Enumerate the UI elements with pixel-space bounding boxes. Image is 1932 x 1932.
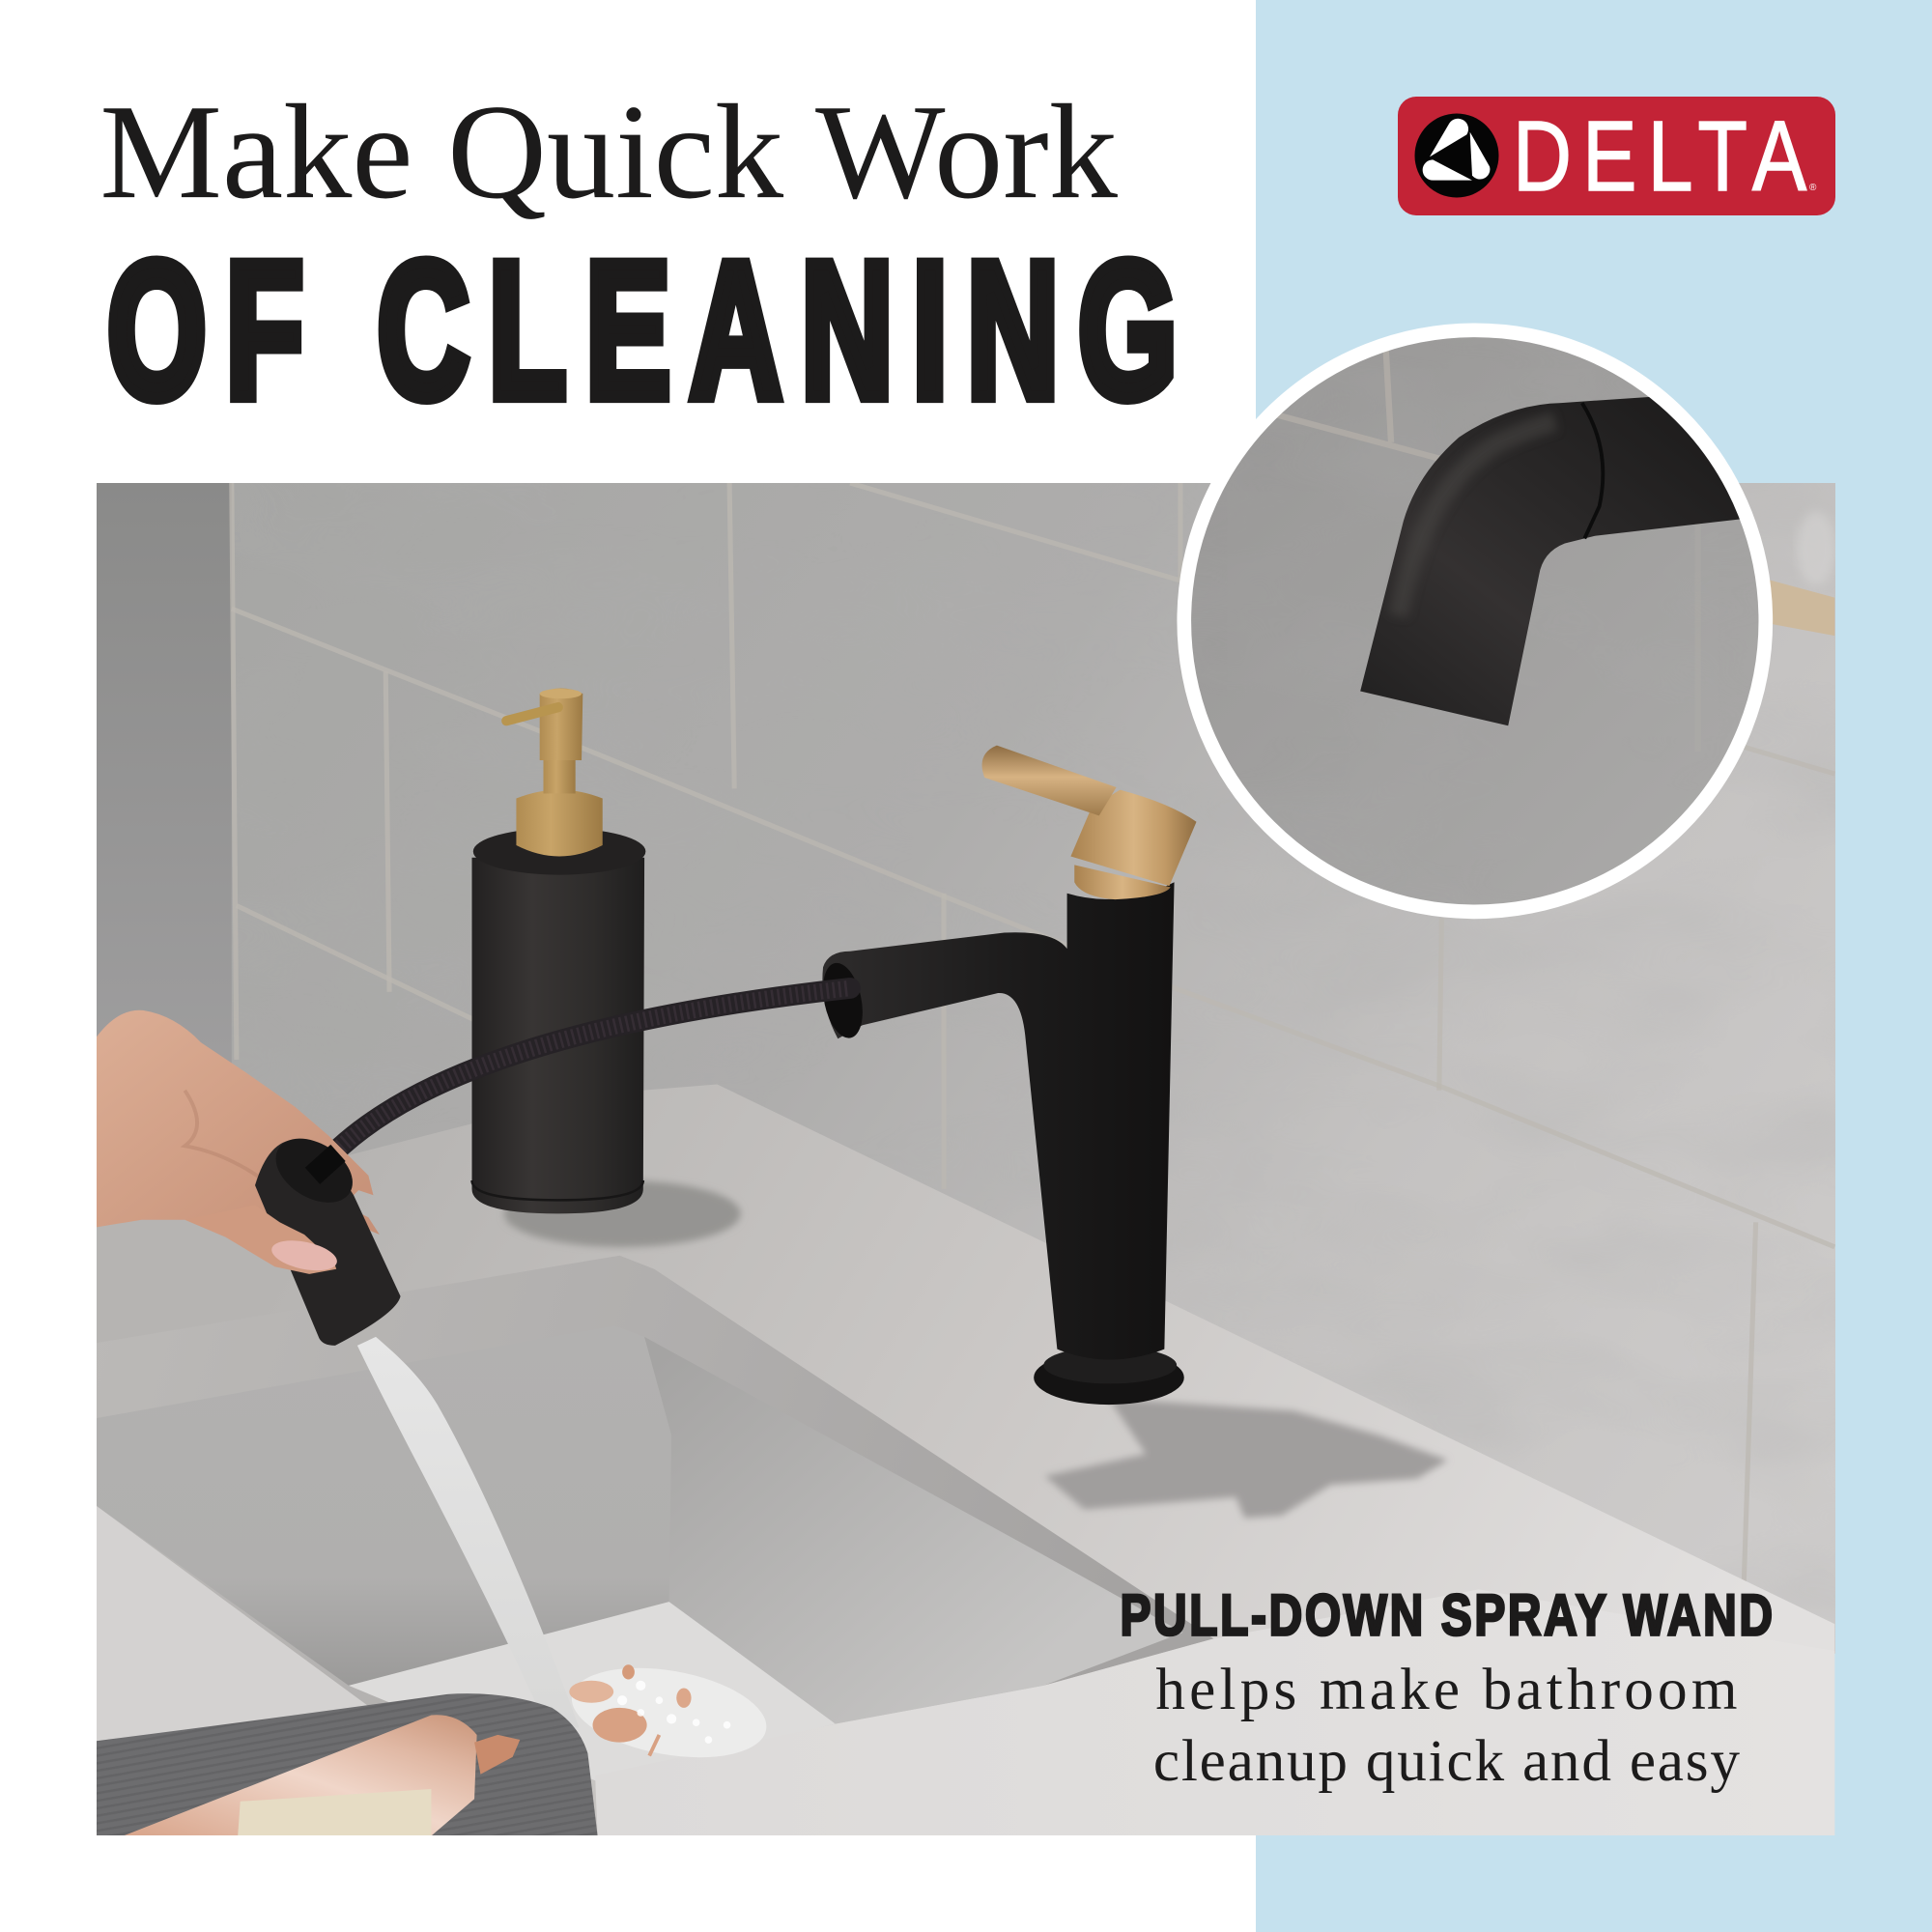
- vanity counter: [96, 1084, 1834, 1836]
- foam and makeup in the basin: [569, 1664, 767, 1758]
- spray wand: [255, 1125, 401, 1346]
- caption heading: PULL-DOWN SPRAY WAND: [1120, 1582, 1773, 1648]
- title line 1: Make Quick Work: [99, 77, 1119, 227]
- towel: [96, 1693, 598, 1836]
- tube of cream: [124, 1715, 520, 1836]
- magnified spout callout: [1182, 330, 1786, 912]
- faucet shadow: [1045, 1399, 1448, 1518]
- callout marble: [1182, 332, 1775, 912]
- dispenser body: [472, 858, 644, 1213]
- dispenser bottom ring: [472, 1180, 643, 1200]
- towel hook highlight: [1799, 514, 1833, 582]
- faucet base: [1034, 1347, 1184, 1405]
- spout collar seam: [1582, 403, 1603, 538]
- sink right wall: [644, 1337, 1182, 1723]
- left counter slab: [97, 1506, 367, 1741]
- callout tile grout: [1269, 332, 1698, 752]
- hand crease: [185, 1091, 259, 1177]
- soap dispenser: [472, 688, 645, 1213]
- logo wordmark: DELTA: [1513, 100, 1806, 212]
- title line 2: OF CLEANING: [107, 221, 1178, 438]
- logo red badge: [1398, 97, 1835, 215]
- front counter slab: [595, 1596, 1445, 1835]
- sink floor: [349, 1602, 836, 1780]
- sponge: [238, 1789, 431, 1836]
- spout opening: [823, 963, 863, 1038]
- logo registered mark: ®: [1809, 183, 1817, 193]
- water stream: [357, 1337, 543, 1644]
- title: [99, 77, 1178, 438]
- caption: [1120, 1582, 1773, 1794]
- sink rim: [313, 1256, 1213, 1723]
- hand, back and fingers behind the wand: [96, 1010, 380, 1235]
- wand hose connector: [305, 1145, 346, 1184]
- hand, finger in front of the wand: [185, 1205, 340, 1276]
- callout background: [1188, 334, 1762, 908]
- gold towel bar: [1762, 578, 1834, 636]
- soap dispenser shadow: [504, 1180, 741, 1247]
- sink basin: [97, 1256, 1445, 1835]
- callout white ring: [1184, 330, 1766, 912]
- logo emblem: [1414, 113, 1499, 197]
- caption line 1: helps make bathroom: [1155, 1657, 1737, 1722]
- gold handle: [982, 746, 1197, 899]
- dispenser lid: [473, 828, 645, 875]
- spout highlight: [1399, 421, 1555, 616]
- pull-out hose: [323, 988, 850, 1164]
- caption line 2: cleanup quick and easy: [1153, 1728, 1740, 1794]
- callout spout: [1360, 394, 1786, 725]
- logo: Delta: [1398, 97, 1835, 215]
- nail: [269, 1236, 340, 1276]
- light blue side band: [1256, 0, 1932, 1932]
- brass pump: [506, 688, 603, 856]
- tiled wall: [96, 483, 1836, 1654]
- panel: bathroom photo: [96, 483, 1836, 1836]
- faucet: [817, 746, 1197, 1405]
- faucet body and spout: [822, 882, 1175, 1360]
- sink back wall: [97, 1408, 601, 1686]
